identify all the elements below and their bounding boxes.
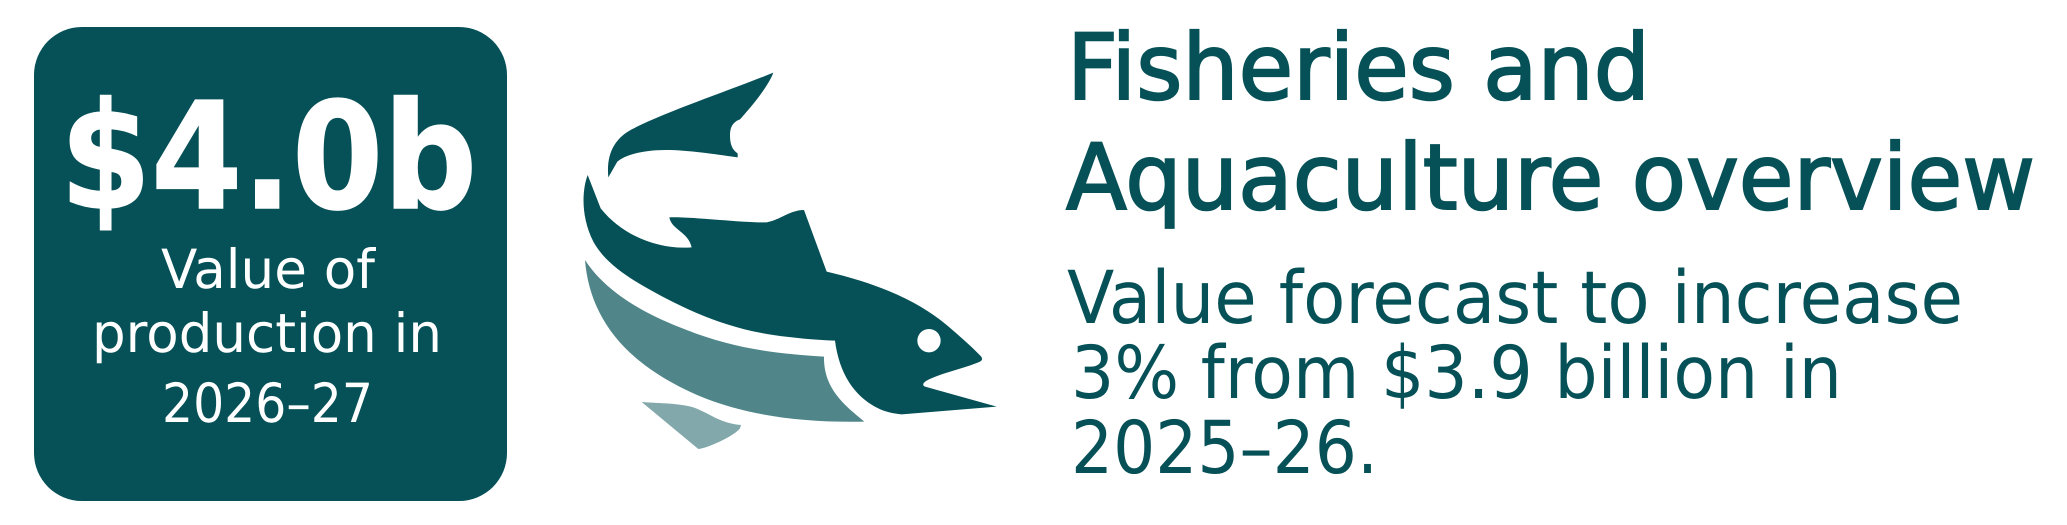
fish belly (585, 260, 864, 422)
title: Fisheries and (1067, 16, 1650, 121)
big number: $4.0b (60, 71, 477, 243)
description text (1067, 256, 1963, 491)
tail fin (608, 73, 773, 177)
title (1066, 16, 2035, 231)
description text: 3% from $3.9 billion in (1071, 331, 1842, 416)
stat caption (92, 238, 442, 435)
icon: fish (584, 73, 997, 449)
stat caption: Value of (161, 238, 377, 301)
title: Aquaculture overview (1066, 126, 2035, 231)
panel: value stat (34, 27, 507, 501)
fish upper body (584, 175, 997, 414)
panel background (34, 27, 507, 501)
stat caption: 2026–27 (162, 372, 373, 435)
description text: Value forecast to increase (1067, 256, 1963, 341)
stat caption: production in (92, 302, 442, 365)
lower fin (642, 402, 741, 449)
description text: 2025–26. (1071, 406, 1378, 491)
fish eye (917, 329, 941, 352)
